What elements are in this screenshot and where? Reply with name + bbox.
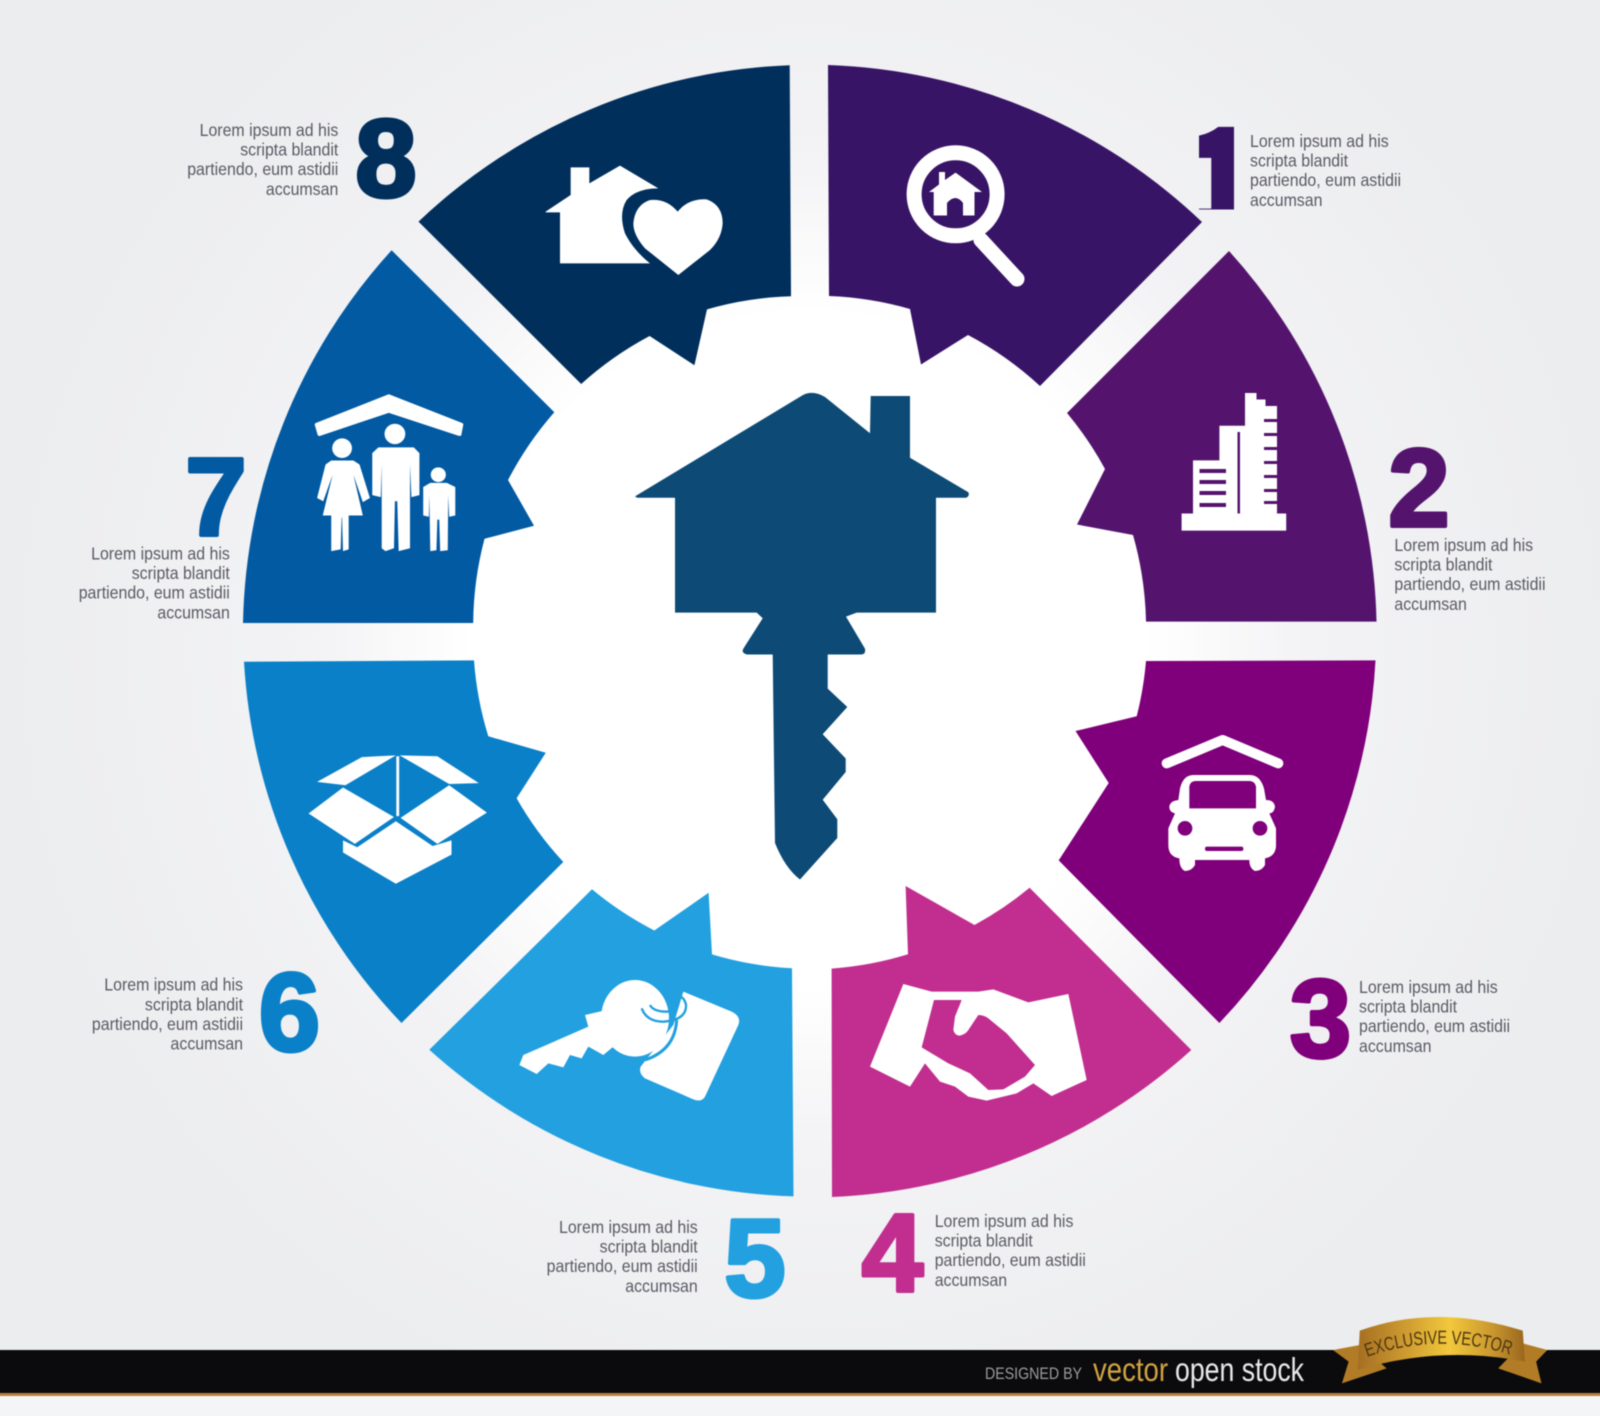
text block 1: accumsan	[1250, 190, 1322, 210]
text block 5: partiendo, eum astidii	[547, 1256, 698, 1276]
text block 4: Lorem ipsum ad his	[935, 1211, 1073, 1231]
icon: family under roof	[317, 396, 461, 551]
text block 7: scripta blandit	[132, 563, 230, 583]
text block 1	[1250, 131, 1401, 210]
segment 8	[418, 65, 791, 384]
text block 6	[92, 975, 243, 1054]
text block 2	[1394, 535, 1545, 614]
footer brand: open stock: open stock	[1175, 1351, 1304, 1388]
text block 5	[547, 1217, 698, 1296]
footer bar	[0, 1350, 1600, 1416]
icon: key with tag	[519, 980, 739, 1101]
text block 3: Lorem ipsum ad his	[1359, 977, 1498, 997]
segment 3	[1059, 660, 1376, 1023]
text block 7: accumsan	[157, 602, 230, 623]
panel 3: car	[1059, 660, 1376, 1023]
text block 4: accumsan	[935, 1270, 1007, 1290]
number 7: 7	[185, 436, 247, 559]
text block 8: Lorem ipsum ad his	[200, 120, 338, 140]
text block 2: partiendo, eum astidii	[1394, 574, 1545, 594]
panel 8: house with heart	[418, 65, 791, 384]
icon: handshake	[870, 984, 1087, 1101]
segment 2	[1067, 251, 1376, 622]
text block 1: scripta blandit	[1250, 151, 1348, 171]
text block 6: Lorem ipsum ad his	[104, 975, 243, 995]
text block 3	[1359, 977, 1510, 1056]
icon: city buildings	[1182, 393, 1286, 531]
text block 2: Lorem ipsum ad his	[1394, 535, 1533, 555]
panel 5: key and tag	[429, 889, 794, 1196]
text block 8	[187, 120, 339, 199]
text block 4: partiendo, eum astidii	[935, 1250, 1086, 1270]
text block 6: accumsan	[171, 1034, 243, 1054]
icon: house and heart	[546, 166, 723, 275]
text block 1: Lorem ipsum ad his	[1250, 131, 1389, 151]
text block 7: Lorem ipsum ad his	[91, 544, 230, 564]
text block 7	[79, 544, 230, 623]
segment 4	[832, 886, 1191, 1197]
segment 6	[244, 660, 563, 1023]
text block 4: scripta blandit	[935, 1231, 1033, 1251]
badge: exclusive vector ribbon	[1332, 1316, 1548, 1384]
icon: magnifier over house	[914, 153, 1017, 279]
text block 8: scripta blandit	[240, 140, 339, 160]
icon: open box	[309, 755, 487, 884]
segment 5	[429, 889, 794, 1196]
central house key	[635, 393, 969, 880]
number 6: 6	[259, 952, 320, 1074]
text block 8: partiendo, eum astidii	[187, 159, 338, 179]
text block 6: scripta blandit	[145, 994, 243, 1015]
text block 8: accumsan	[266, 179, 338, 199]
number 4: 4	[862, 1192, 923, 1315]
footer credit: designed by: DESIGNED BY	[985, 1364, 1082, 1383]
text block 5: Lorem ipsum ad his	[559, 1217, 698, 1237]
text block 3: partiendo, eum astidii	[1359, 1016, 1510, 1036]
text block 2: scripta blandit	[1394, 555, 1493, 575]
text block 3: accumsan	[1359, 1036, 1431, 1056]
panel 7: family	[243, 250, 554, 623]
panel 4: handshake	[832, 886, 1191, 1197]
text block 5: accumsan	[625, 1276, 698, 1296]
text block 5: scripta blandit	[600, 1237, 698, 1257]
panel 1: search	[828, 65, 1202, 386]
number 1: 1	[1189, 74, 1253, 270]
text block 2: accumsan	[1394, 594, 1467, 614]
text block 3: scripta blandit	[1359, 997, 1457, 1017]
footer brand: vector: vector	[1093, 1351, 1168, 1388]
number 2: 2	[1388, 427, 1450, 550]
icon: car under roof	[1167, 740, 1278, 871]
panel 2: buildings	[1067, 251, 1376, 622]
text block 7: partiendo, eum astidii	[79, 583, 230, 603]
segment 7	[243, 250, 554, 623]
number 8: 8	[355, 98, 417, 220]
text block 6: partiendo, eum astidii	[92, 1014, 243, 1034]
badge: exclusive vector ribbon: EXCLUSIVE VECTOR	[1364, 1330, 1513, 1357]
number 5: 5	[724, 1198, 786, 1320]
text block 4	[935, 1211, 1086, 1290]
panel 6: moving box	[244, 660, 563, 1023]
text block 1: partiendo, eum astidii	[1250, 170, 1401, 190]
number 3: 3	[1290, 958, 1351, 1081]
segment 1	[828, 65, 1202, 386]
